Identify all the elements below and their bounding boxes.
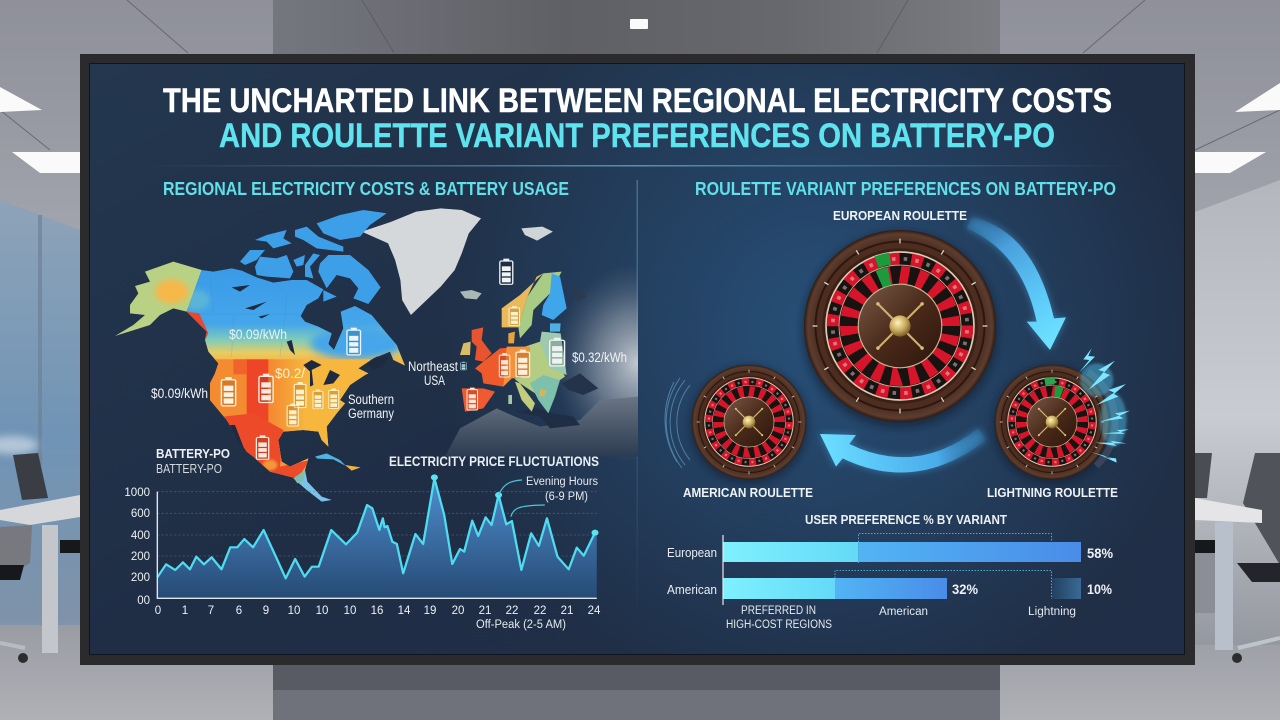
- batteries: [221, 259, 565, 459]
- bar: Lightning 10%: 10%: [1087, 581, 1112, 597]
- x axis labels: 19: [424, 605, 436, 617]
- x axis labels: 21: [479, 605, 491, 617]
- Alaska and Canada: [115, 210, 405, 486]
- title: THE UNCHARTED LINK BETWEEN REGIONAL ELECTRICITY COSTS: [163, 82, 1112, 120]
- wheel: American roulette: [665, 365, 808, 484]
- bar chart: user preference by variant: [667, 513, 1114, 631]
- monitor stand: [273, 665, 1000, 720]
- ceiling: [0, 0, 1280, 240]
- x axis labels: 20: [452, 605, 464, 617]
- annotations: Evening Hours: [526, 476, 598, 488]
- heading: regional electricity: REGIONAL ELECTRICITY COSTS & BATTERY USAGE: [163, 179, 569, 199]
- x axis labels: 21: [561, 605, 573, 617]
- icon: lightning bolts: [1078, 348, 1130, 463]
- x axis labels: 9: [263, 605, 269, 617]
- x axis labels: 16: [371, 605, 383, 617]
- y axis labels: 1000: [124, 487, 150, 499]
- bar: American 32%: [667, 578, 979, 599]
- arrow: Lightning to American: [820, 428, 986, 473]
- monitor frame: [80, 54, 1195, 665]
- bar: Lightning 10%: [1052, 578, 1112, 599]
- battery-po labels: BATTERY-PO: [156, 461, 222, 476]
- label: Lightning: LIGHTNING ROULETTE: [987, 485, 1118, 500]
- battery-po labels: [156, 446, 230, 476]
- label: American: AMERICAN ROULETTE: [683, 485, 813, 500]
- x axis labels: 7: [208, 605, 214, 617]
- y axis labels: 600: [131, 508, 150, 520]
- bar axis labels: American: [879, 606, 928, 618]
- map cost labels: [151, 327, 627, 421]
- title: [163, 82, 1112, 155]
- wheel: European roulette: [802, 230, 998, 428]
- line and area: [157, 474, 599, 598]
- title: AND ROULETTE VARIANT PREFERENCES ON BATTERY-PO: [219, 117, 1055, 155]
- Arctic islands: [240, 210, 387, 304]
- arrow: European to Lightning: [967, 217, 1066, 350]
- chart: electricity price fluctuations: [124, 454, 601, 631]
- floor: [0, 625, 1280, 720]
- x axis labels: 22: [534, 605, 546, 617]
- chart title: ELECTRICITY PRICE FLUCTUATIONS: [389, 454, 599, 469]
- annotations: Off-Peak (2-5 AM): [476, 619, 566, 631]
- x axis labels: 0: [155, 605, 161, 617]
- map: North America and Europe: [115, 208, 720, 502]
- annotations: (6-9 PM): [545, 491, 588, 503]
- bar: American 32%: American: [667, 583, 717, 597]
- mainland Canada, USA and Mexico: [187, 268, 405, 478]
- bar: European 58%: European: [667, 546, 717, 560]
- lakes: [232, 285, 340, 387]
- x axis labels: 10: [316, 605, 328, 617]
- map cost labels: $0.32/kWh: [572, 350, 627, 365]
- Central America and Caribbean: [293, 453, 361, 502]
- y axis labels: 200: [131, 572, 150, 584]
- map cost labels: $0.09/kWh: [229, 327, 287, 342]
- map cost labels: Northeast: [408, 359, 458, 374]
- wheel: Lightning roulette: [993, 348, 1130, 484]
- y axis labels: 200: [131, 551, 150, 563]
- bar axis labels: Lightning: [1028, 606, 1076, 618]
- panel: roulette variant preferences: [665, 179, 1130, 631]
- y axis labels: 400: [131, 530, 150, 542]
- left wall windows: [0, 200, 80, 625]
- ceiling lights: [0, 19, 1280, 173]
- right wall: [1195, 180, 1280, 650]
- Europe, eastern globe and Africa: [446, 271, 638, 456]
- map cost labels: USA: [424, 373, 445, 388]
- battery-po labels: BATTERY-PO: [156, 446, 230, 461]
- y axis labels: [124, 487, 150, 607]
- map cost labels: Germany: [348, 406, 394, 421]
- x axis labels: 10: [344, 605, 356, 617]
- x axis labels: 22: [506, 605, 518, 617]
- map cost labels: Southern: [348, 392, 394, 407]
- x axis labels: 10: [288, 605, 300, 617]
- bar: European 58%: 58%: [1087, 545, 1114, 561]
- bar: European 58%: [667, 542, 1114, 562]
- map cost labels: $0.09/kWh: [151, 386, 208, 401]
- x axis labels: 14: [398, 605, 411, 617]
- x axis labels: 6: [236, 605, 242, 617]
- bar axis labels: PREFERRED IN: [741, 605, 816, 617]
- x axis labels: 1: [182, 605, 188, 617]
- heading: roulette variants: ROULETTE VARIANT PREFERENCES ON BATTERY-PO: [695, 179, 1116, 199]
- left desk and chair: [0, 453, 80, 663]
- bar chart title: USER PREFERENCE % BY VARIANT: [805, 513, 1007, 527]
- map cost labels: $0.2/: [275, 366, 305, 381]
- annotations: [476, 476, 598, 631]
- y axis labels: 00: [137, 595, 150, 607]
- x axis labels: 24: [588, 605, 601, 617]
- bar axis labels: HIGH-COST REGIONS: [726, 619, 832, 631]
- bar: American 32%: 32%: [952, 581, 979, 597]
- bar axis labels: [726, 605, 1076, 631]
- right desk and chairs: [1195, 453, 1280, 663]
- label: European: EUROPEAN ROULETTE: [833, 208, 967, 223]
- panel: regional electricity costs: [115, 182, 638, 630]
- x axis labels: [155, 605, 601, 617]
- Greenland and Svalbard: [362, 208, 553, 315]
